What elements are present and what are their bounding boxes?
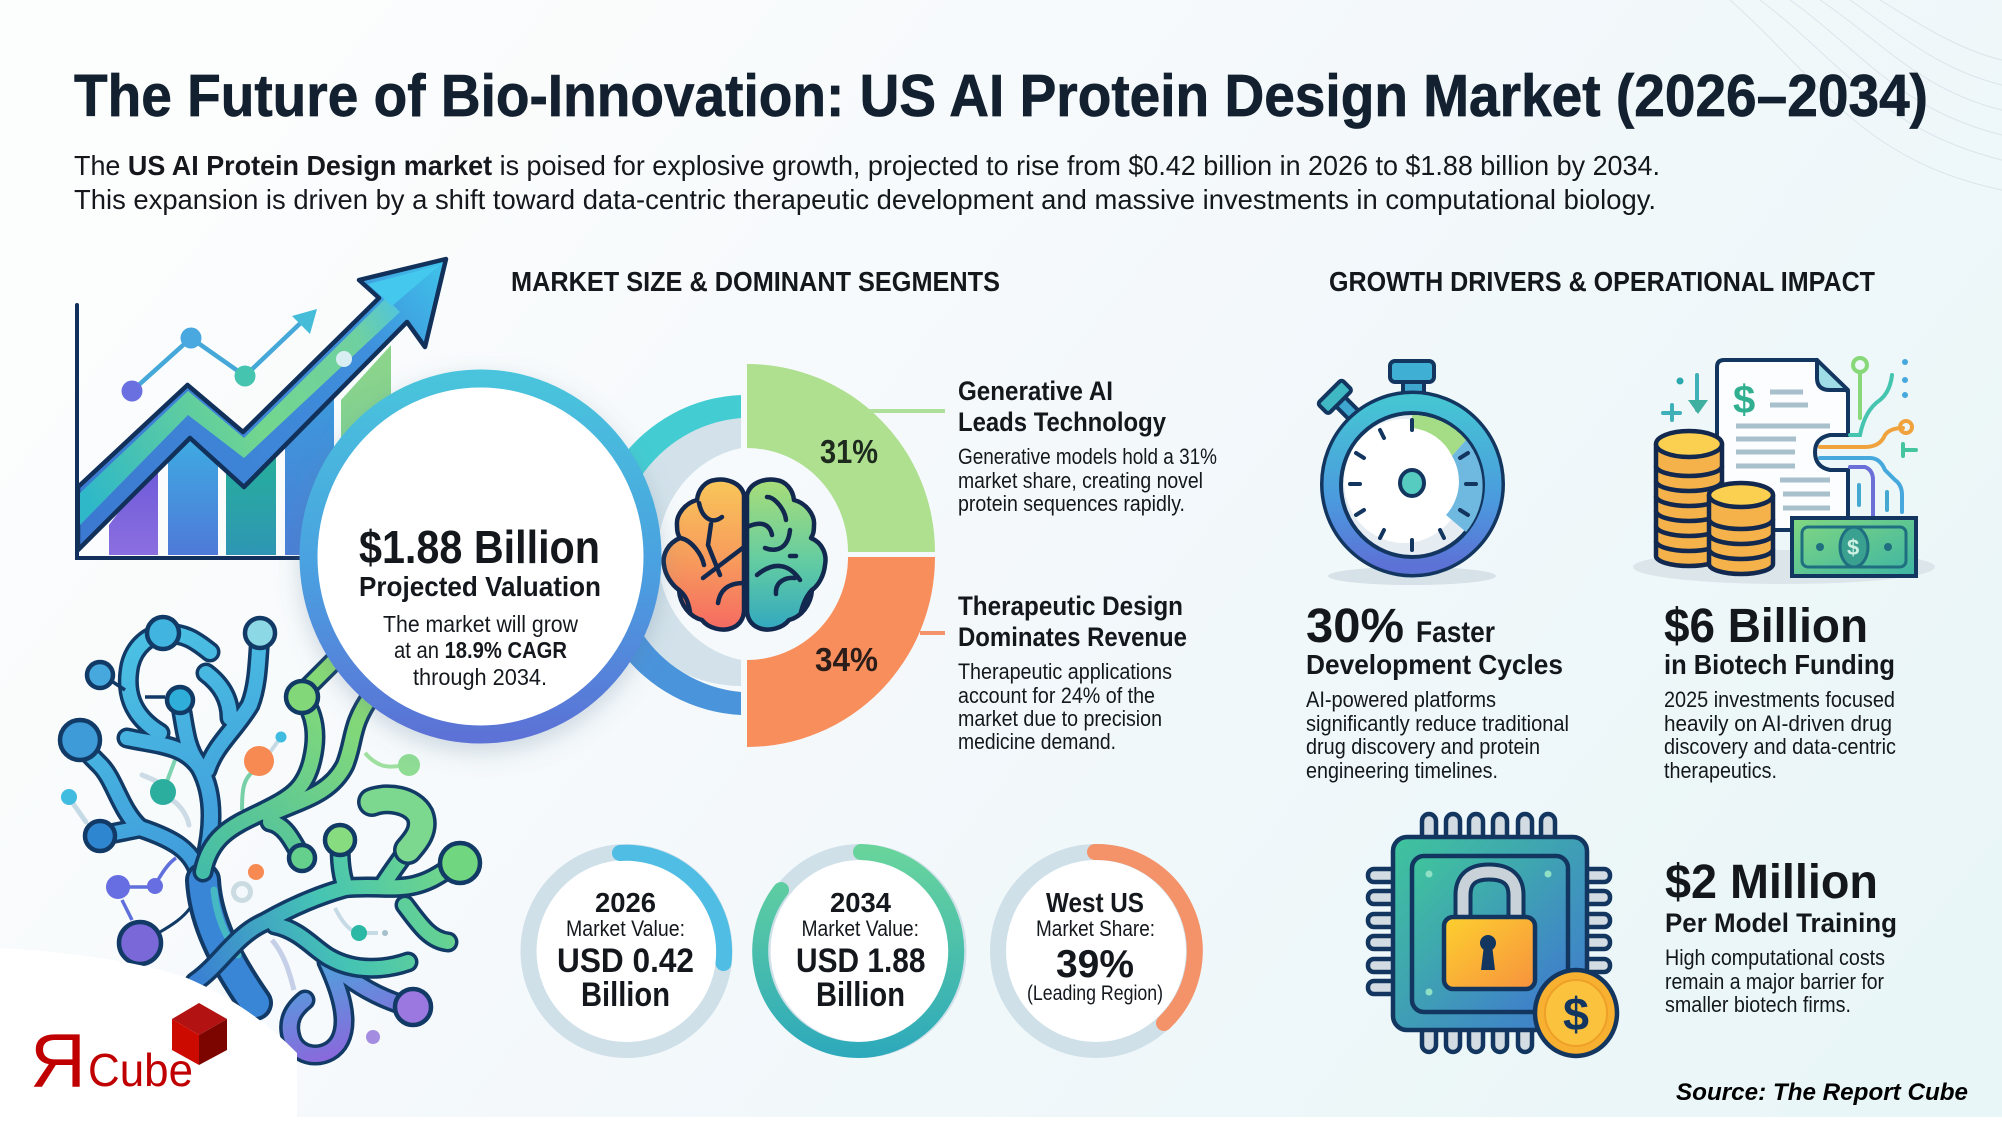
stopwatch shadow [1328,567,1496,585]
therapeutic description: market due to precision [958,706,1162,731]
valuation label: Projected Valuation [359,571,601,602]
$6 billion description [1664,687,1896,783]
stat ring: West US: Market Share: [1036,916,1155,941]
generative description: market share, creating novel [958,468,1203,493]
30% description: engineering timelines. [1306,758,1498,783]
$6 billion heading: $6 Billion [1664,600,1868,653]
stopwatch crown [1318,361,1434,428]
valuation circle [308,378,652,734]
generative description: protein sequences rapidly. [958,491,1185,516]
heading: growth drivers: GROWTH DRIVERS & OPERATIONAL IMPACT [1329,266,1875,297]
growth chart icon [77,259,446,558]
generative heading [958,376,1166,437]
logo [30,1003,227,1104]
teal arc [620,395,741,478]
$6 billion heading: in Biotech Funding [1664,649,1895,680]
$2 million heading: Per Model Training [1665,908,1897,938]
generative heading: Generative AI [958,376,1113,406]
tree blue branches [60,617,275,1003]
logo cube [172,1003,227,1065]
background wave lines [1730,0,2002,190]
30% description: drug discovery and protein [1306,734,1540,759]
text block: therapeutic design [958,591,1187,754]
text block: generative AI [958,376,1217,516]
bottom white strip [0,1117,2002,1127]
stat ring: 2034: Market Value: [802,916,919,941]
valuation text [383,611,579,690]
therapeutic heading: Dominates Revenue [958,622,1187,652]
valuation text: The market will grow [383,611,579,637]
banknote: $ [1847,535,1859,560]
stat ring: West US [998,852,1195,1050]
valuation ring [308,378,652,734]
small trend line [122,309,317,402]
30% heading: Development Cycles [1306,649,1563,680]
icon: brain [664,480,825,630]
segment donut [607,364,945,747]
generative heading: Leads Technology [958,407,1166,437]
rising arrow [78,259,446,550]
funding shadow [1633,550,1935,584]
therapeutic description: Therapeutic applications [958,659,1172,684]
30% description: significantly reduce traditional [1306,711,1569,736]
stopwatch face [1341,413,1483,557]
30% heading: 30% [1306,600,1404,653]
stat ring: West US: (Leading Region) [1027,982,1163,1005]
text block: 30% faster [1306,600,1569,783]
logo panel: white corner [0,948,297,1127]
$6 billion heading [1664,600,1895,680]
icon: locked chip [1368,814,1617,1056]
stopwatch body [1332,403,1492,565]
chart axes [77,305,310,558]
heading: market size: MARKET SIZE & DOMINANT SEGMENTS [511,266,1000,297]
dollar coin [1535,970,1617,1056]
$2 million heading: $2 Million [1665,856,1878,909]
connector: green [869,409,945,413]
30% description: AI-powered platforms [1306,687,1496,712]
tree green branches [203,655,372,872]
$2 million description: High computational costs [1665,945,1885,970]
dollar coin: $ [1563,988,1589,1040]
padlock [1444,872,1535,989]
30% heading: Faster [1416,616,1495,649]
stopwatch hub [1400,470,1424,496]
intro text: This expansion is driven by a shift toward data-centric therapeutic development and massive investments in computational biology. [74,184,1656,215]
chip dots [1426,870,1552,996]
label 34%: 34% [815,641,878,678]
$2 million description [1665,945,1885,1017]
chip inner plate [1412,856,1568,1012]
$6 billion description: therapeutics. [1664,758,1777,783]
stat ring: West US: 39% [1056,943,1134,986]
stat ring: 2034 [760,852,958,1050]
text block: $2 million [1665,856,1897,1017]
intro text: The US AI Protein Design market is poised for explosive growth, projected to rise from $0.42 billion in 2026 to $1.88 billion by 2034. [74,150,1660,181]
valuation text: at an 18.9% CAGR [394,637,567,663]
label 31%: 31% [820,433,878,470]
stat ring: 2026: 2026 [595,887,656,918]
source note: Source: The Report Cube [1676,1079,1968,1106]
stat ring: 2026: USD 0.42 [557,942,694,980]
$6 billion description: heavily on AI-driven drug [1664,711,1892,736]
logo mark: Я [30,1019,86,1104]
logo word: Cube [88,1044,193,1096]
funding document [1717,360,1848,530]
stopwatch ticks [1350,420,1476,550]
therapeutic description: account for 24% of the [958,683,1155,708]
therapeutic description [958,659,1172,754]
therapeutic description: medicine demand. [958,729,1116,754]
coin stacks [1656,431,1773,574]
text block: $6 billion [1664,600,1896,783]
$2 million heading [1665,856,1897,938]
valuation figure: $1.88 Billion [359,521,600,573]
$6 billion description: 2025 investments focused [1664,687,1895,712]
stat ring: 2034: Billion [816,976,905,1014]
stat ring: 2026 [528,852,724,1050]
orange segment: 34% [747,557,935,747]
chip body [1393,837,1587,1030]
generative description: Generative models hold a 31% [958,444,1217,469]
$2 million description: remain a major barrier for [1665,969,1884,994]
$6 billion description: discovery and data-centric [1664,734,1896,759]
protein tree illustration [60,617,480,1055]
green segment: 31% [747,364,935,552]
therapeutic heading: Therapeutic Design [958,591,1183,621]
therapeutic heading [958,591,1187,652]
donut back ring [607,418,741,686]
banknote [1792,518,1916,576]
funding circuit [1663,358,1916,516]
stat ring: West US: West US [1046,887,1144,918]
chart bars [109,345,391,555]
stat ring: 2034: USD 1.88 [796,942,926,980]
tree lower branches [119,799,480,1055]
30% description [1306,687,1569,783]
funding document: $ [1733,378,1755,422]
stopwatch wedge [1412,415,1466,456]
stat ring: 2034: 2034 [830,887,891,918]
connector: orange [920,631,945,635]
stat ring: 2026: Billion [581,976,670,1014]
30% heading [1306,600,1563,680]
icon: funding [1633,358,1935,584]
tree small molecules [61,732,420,1044]
chip pins [1368,814,1610,1052]
$2 million description: smaller biotech firms. [1665,992,1851,1017]
generative description [958,444,1217,516]
stat ring: 2026: Market Value: [566,916,685,941]
blue arc [620,630,741,715]
valuation text: through 2034. [413,664,547,690]
intro text [74,150,1660,215]
icon: stopwatch [1318,361,1496,585]
